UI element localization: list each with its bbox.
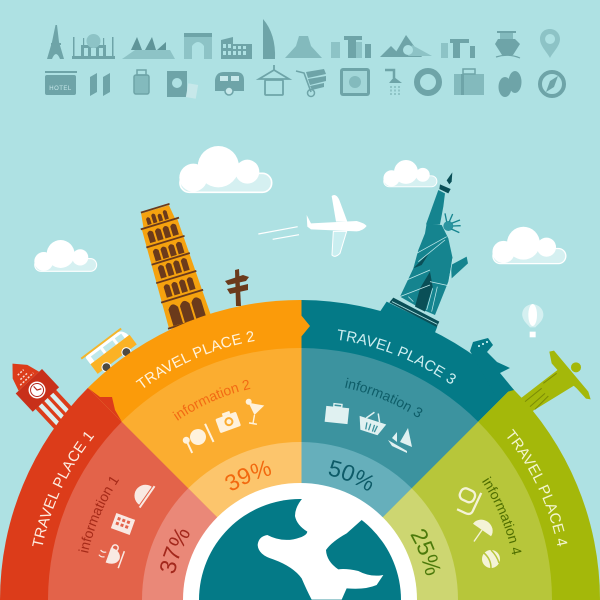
percent: 50%: 50% <box>328 460 374 490</box>
landmark: leaning tower of Pisa <box>133 201 212 329</box>
icon: Colosseum <box>221 37 252 59</box>
icon: map pin <box>540 29 560 58</box>
icon: Taj Mahal <box>72 34 115 59</box>
hot air balloon <box>522 304 543 337</box>
icon: beach ball <box>482 550 500 568</box>
icon: shopping basket <box>356 408 389 437</box>
icon: hotel sign <box>45 71 77 95</box>
label: information 3: information 3 <box>345 378 422 418</box>
icon: briefcase <box>454 69 484 95</box>
heading: Travel Place 4: TRAVEL PLACE 4 <box>507 428 568 546</box>
segment: red middle band <box>48 422 300 600</box>
segment: green middle band <box>300 422 552 600</box>
percent: 39%: 39% <box>225 460 271 490</box>
cloud: above statue <box>383 160 437 187</box>
notch: green <box>478 388 512 422</box>
segment: orange outer band <box>88 300 302 600</box>
cloud: right <box>492 227 566 264</box>
icon: hotel sign: HOTEL <box>49 86 72 92</box>
icon: shower <box>385 70 402 96</box>
label: information 1: information 1 <box>78 476 119 553</box>
icon: hotel building <box>111 513 135 535</box>
icon: snorkel mask <box>453 485 481 516</box>
icon: caravan <box>215 72 244 95</box>
icon: compass <box>540 72 564 96</box>
icon: flip flops <box>498 71 522 97</box>
icon: beach umbrella <box>465 515 497 548</box>
heading: Travel Place 1: TRAVEL PLACE 1 <box>32 432 94 546</box>
icon: Sydney opera house <box>122 37 175 59</box>
segment: green outer band <box>300 388 600 600</box>
icon: camera <box>214 409 241 433</box>
icon: Stonehenge small <box>441 39 475 58</box>
icon: folded map <box>90 73 110 96</box>
icon: pyramids <box>380 35 432 57</box>
icon: Mayan pyramid <box>285 36 322 58</box>
notch: orange <box>301 315 310 337</box>
icon: hanger with towel <box>259 65 289 95</box>
icon grid: travel icons <box>45 19 564 99</box>
icon: passport <box>167 71 198 99</box>
cloud: left small <box>34 240 97 271</box>
signpost <box>225 269 249 306</box>
landmark: Christ the Redeemer <box>521 351 591 412</box>
airplane with motion lines <box>258 195 367 256</box>
notch: red <box>88 388 122 422</box>
icon: luggage cart <box>296 69 326 96</box>
icon: cocktail <box>242 398 265 426</box>
heading: Travel Place 3: TRAVEL PLACE 3 <box>338 329 456 384</box>
icon: triumphal arch <box>184 33 212 59</box>
landmark: Statue of Liberty <box>380 172 468 337</box>
icon: life buoy <box>417 71 439 93</box>
segment: red outer band <box>0 388 300 600</box>
percent: 25%: 25% <box>410 529 440 576</box>
continent <box>258 495 383 600</box>
percent: 37%: 37% <box>160 528 190 574</box>
icon: Burj Al Arab <box>263 19 275 59</box>
landmark: Big Ben clock tower <box>0 351 80 434</box>
label: information 2: information 2 <box>172 380 250 420</box>
icon: plate and cutlery <box>180 423 215 454</box>
segment: orange inner band <box>188 442 302 600</box>
icon: sailboat <box>388 428 412 453</box>
landmark: school bus van <box>81 326 139 380</box>
segment: teal inner band <box>300 442 412 600</box>
segment: green inner band <box>300 488 458 600</box>
icon: safe <box>340 68 370 96</box>
segment: teal outer band <box>300 300 512 600</box>
globe <box>183 483 417 600</box>
segment: orange middle band <box>122 348 302 600</box>
icon: briefcase <box>325 403 349 424</box>
segment: red inner band <box>142 488 300 600</box>
heading: Travel Place 2: TRAVEL PLACE 2 <box>136 331 255 388</box>
icon: cruise ship <box>495 31 520 58</box>
cloud: top centre <box>179 146 272 192</box>
icon: Eiffel tower <box>47 25 64 59</box>
landmark: ship silhouette on the arc <box>470 338 514 395</box>
segment: teal middle band <box>300 348 478 600</box>
semicircular chart <box>0 300 600 600</box>
icon: coffee cup <box>97 541 126 568</box>
icon: suitcase <box>134 70 149 94</box>
label: information 4: information 4 <box>482 476 522 555</box>
icon: Stonehenge <box>331 36 371 58</box>
icon: cloche <box>129 479 155 508</box>
